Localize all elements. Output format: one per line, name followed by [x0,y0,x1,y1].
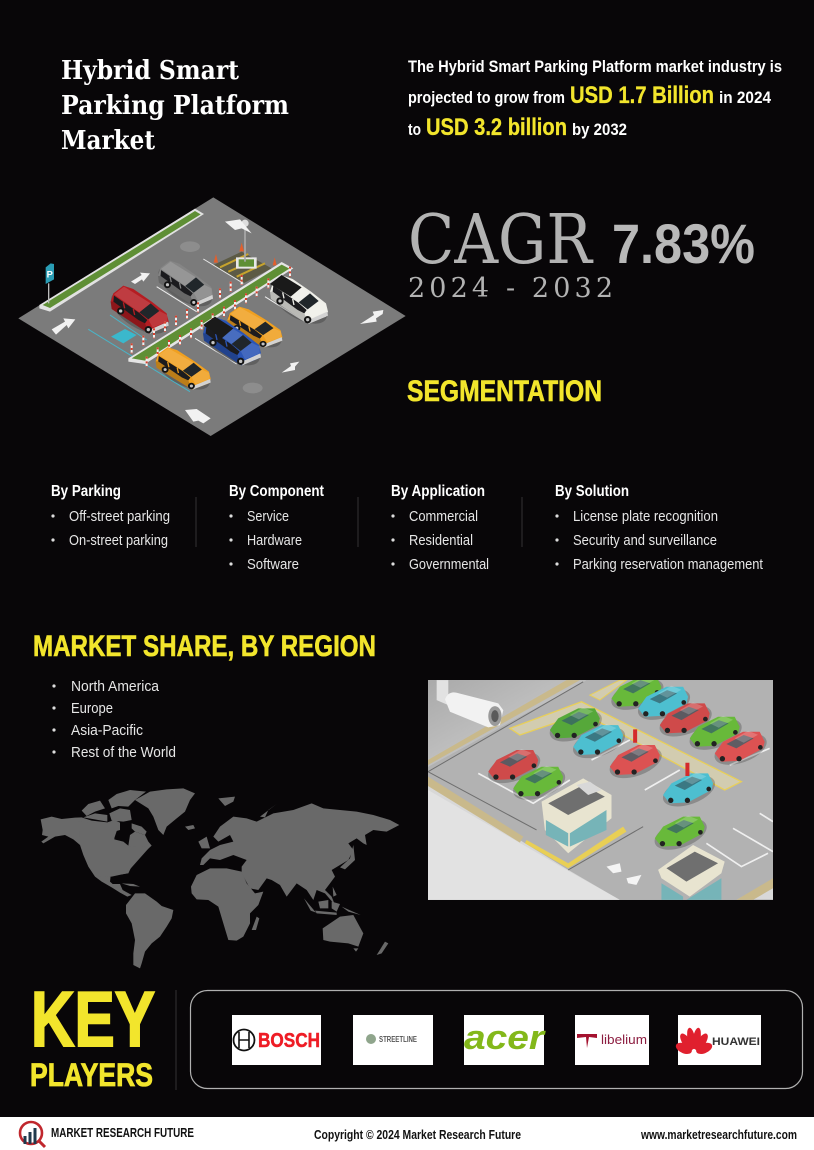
key players heading: KEY [31,975,155,1063]
segment: by solution [555,483,764,573]
segment: by component: Service [247,508,289,525]
logo: Huawei [675,1015,761,1065]
segment: by parking: Off-street parking [69,508,170,525]
logo: Acer: acer [464,1019,546,1057]
footer: Copyright © 2024 Market Research Future [314,1127,521,1142]
market forecast text: USD 3.2 billion [426,114,567,141]
region list: Rest of the World [71,744,176,761]
footer [0,1117,814,1150]
market forecast text [408,57,782,141]
segment: by solution: By Solution [555,483,629,500]
segment: by parking: By Parking [51,483,121,500]
segment: by component: By Component [229,483,325,500]
logo: Libelium [575,1015,649,1065]
logo: Bosch: BOSCH [258,1030,320,1052]
title [61,56,289,156]
region list: North America [71,678,160,695]
segment: by parking [51,483,170,549]
title: Hybrid Smart [61,56,239,86]
market forecast text: USD 1.7 Billion [570,82,714,109]
region list: Asia-Pacific [71,722,143,739]
illustration: isometric parking lot: P [47,269,53,279]
region list [52,678,176,761]
segment: by parking: On-street parking [69,532,168,549]
icon: market research future logo [20,1122,45,1147]
segment: by application [391,483,489,573]
footer: MARKET RESEARCH FUTURE [51,1125,194,1140]
world map [41,788,399,968]
market forecast text: in 2024 [719,88,771,107]
logo: Streetline [353,1015,433,1065]
segment: by application: Residential [409,532,473,549]
segment: by application: Commercial [409,508,478,525]
CAGR callout [408,201,755,304]
segment: by application: By Application [391,483,485,500]
title: Parking Platform [61,91,289,121]
segment: by solution: Security and surveillance [573,532,717,549]
market forecast text: projected to grow from [408,88,565,107]
market forecast text: to [408,120,421,139]
CAGR callout: 2024 - 2032 [408,273,613,304]
segment: by application: Governmental [409,556,489,573]
logo: Acer [464,1015,546,1065]
segmentation heading: SEGMENTATION [407,375,602,408]
segmentation lists [51,483,764,573]
logo: Streetline: STREETLINE [379,1035,418,1044]
segment: by component: Hardware [247,532,302,549]
title: Market [61,126,155,156]
segment: by solution: Parking reservation management [573,556,764,573]
logo: Huawei: HUAWEI [712,1036,760,1048]
CAGR callout: 7.83% [612,212,755,275]
logo: Bosch [232,1015,321,1065]
region list: Europe [71,700,113,717]
key players heading: PLAYERS [30,1057,153,1093]
illustration: parking surveillance scene [428,672,773,900]
segment: by component: Software [247,556,299,573]
segment: by solution: License plate recognition [573,508,718,525]
segment: by component [229,483,325,573]
market forecast text: by 2032 [572,120,627,139]
market share heading: MARKET SHARE, BY REGION [33,630,376,663]
CAGR callout: CAGR [408,201,594,280]
key players panel [190,990,802,1088]
logo: Libelium: libelium [601,1032,647,1047]
illustration: isometric parking lot [18,197,406,436]
key players heading [30,975,155,1093]
